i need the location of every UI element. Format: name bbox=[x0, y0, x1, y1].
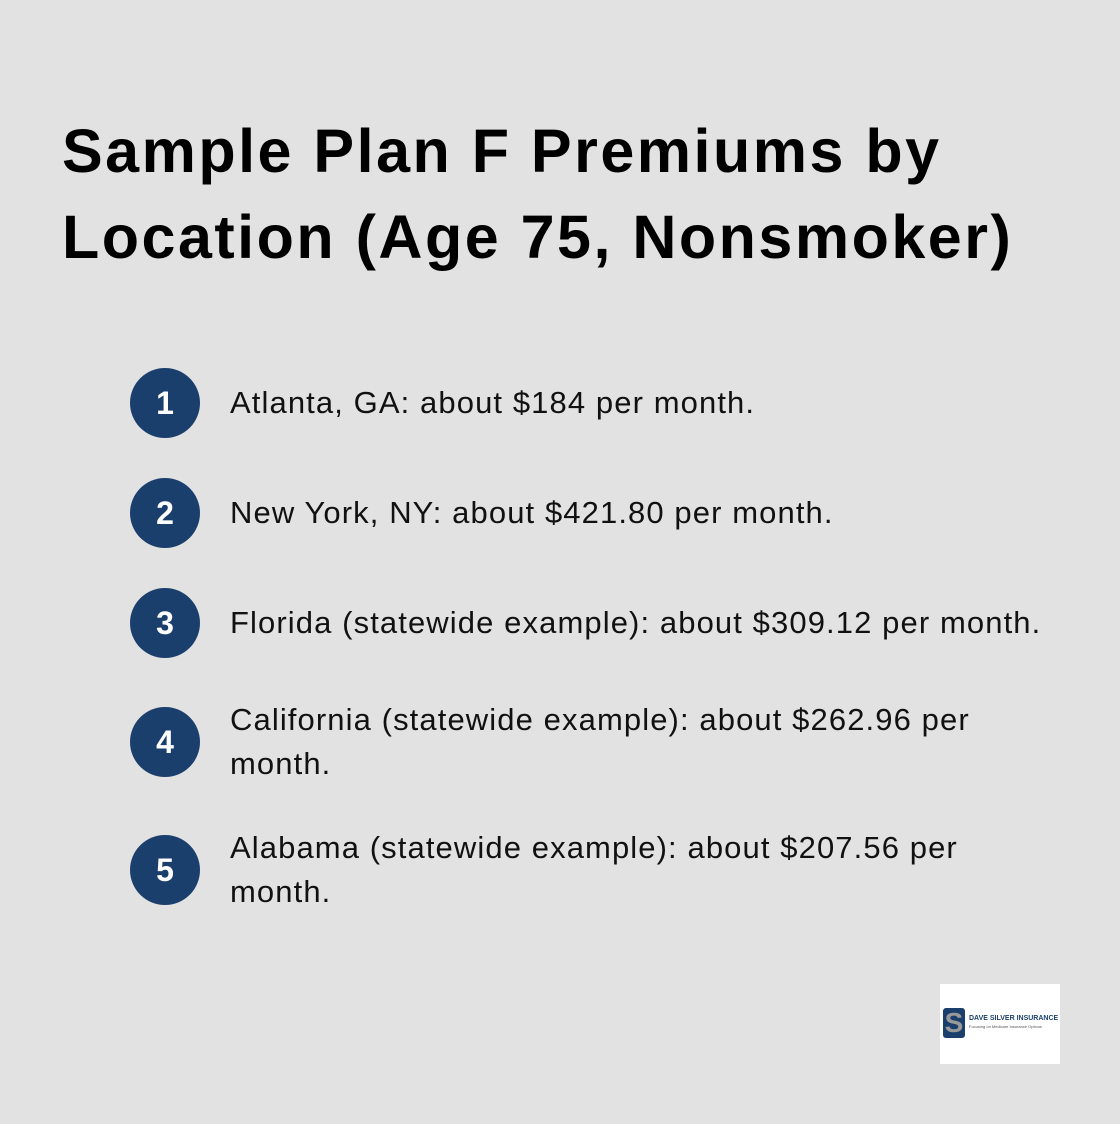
logo bbox=[940, 984, 1060, 1064]
item 3 bbox=[130, 588, 1041, 658]
logo: DAVE SILVER INSURANCE bbox=[969, 1015, 1058, 1022]
item 1: Atlanta, GA: about $184 per month. bbox=[230, 385, 755, 420]
logo: S bbox=[945, 1007, 963, 1038]
title: Sample Plan F Premiums by bbox=[62, 117, 942, 185]
item 1 bbox=[130, 368, 755, 438]
item 4: California (statewide example): about $262.96 per month. bbox=[230, 702, 970, 781]
title: Location (Age 75, Nonsmoker) bbox=[62, 203, 1013, 271]
item 2: New York, NY: about $421.80 per month. bbox=[230, 495, 834, 530]
item 5: 5 bbox=[156, 852, 174, 888]
item 4: 4 bbox=[156, 724, 174, 760]
item 3: Florida (statewide example): about $309.12 per month. bbox=[230, 605, 1041, 640]
logo: Focusing on Medicare Insurance Options bbox=[969, 1024, 1042, 1029]
item 2: 2 bbox=[156, 495, 174, 531]
item 2 bbox=[130, 478, 834, 548]
item 3: 3 bbox=[156, 605, 174, 641]
item 5: Alabama (statewide example): about $207.56 per month. bbox=[230, 830, 958, 909]
title bbox=[62, 117, 1013, 271]
item 1: 1 bbox=[156, 385, 174, 421]
